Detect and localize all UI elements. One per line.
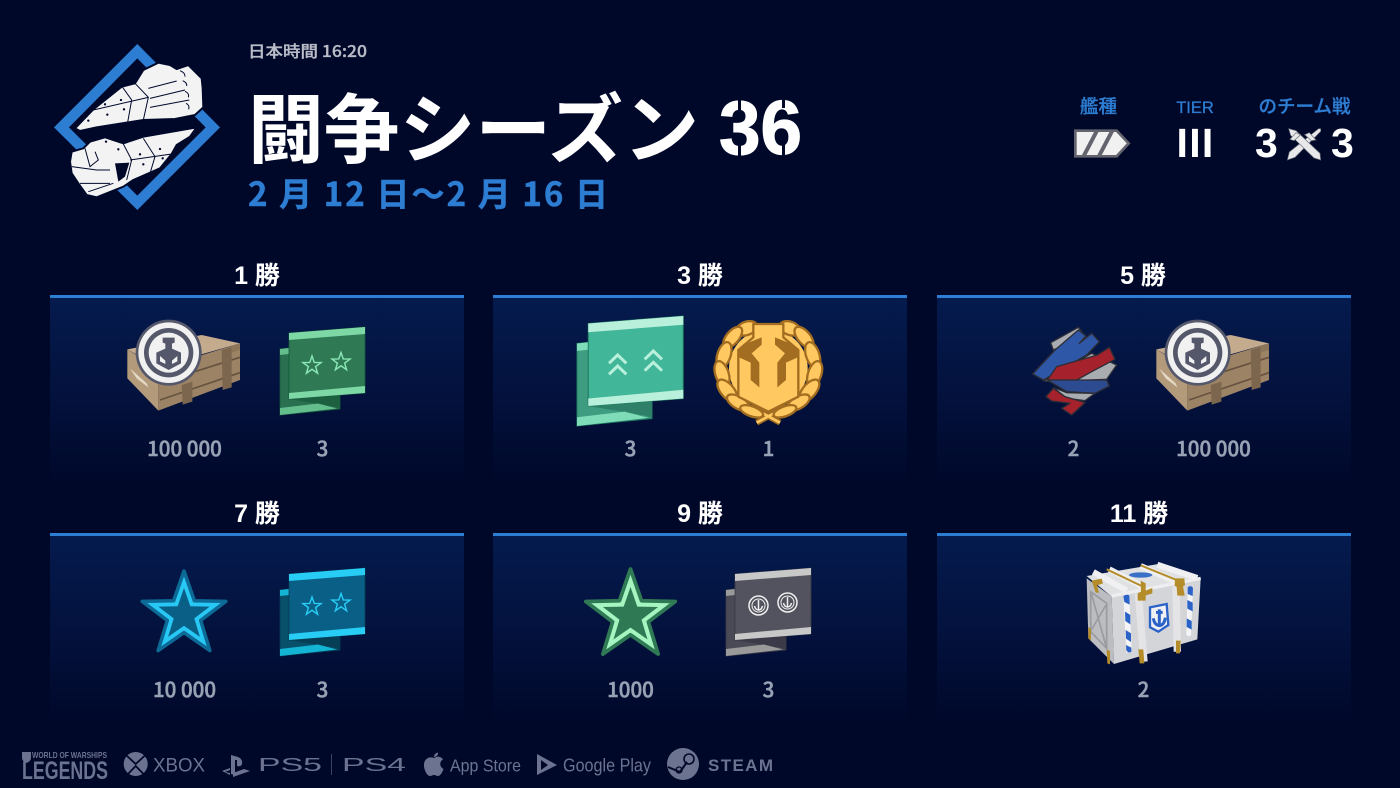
panel: 5 wins xyxy=(937,262,1351,485)
logo: World of Warships Legends: WORLD OF WARSHIPS xyxy=(32,750,107,760)
season number: 36 xyxy=(719,86,802,171)
battle info: team battle xyxy=(1255,93,1354,166)
value: star reward: 10 000 xyxy=(153,673,216,703)
logo: Google Play xyxy=(537,754,651,776)
panel: 9 wins xyxy=(493,500,907,723)
panel: 3 wins xyxy=(493,262,907,485)
logo: Steam: STEAM xyxy=(708,756,773,775)
icon: lower gauntlet xyxy=(70,127,197,197)
logo: PS5 and PS4: PS5 xyxy=(258,755,322,775)
reward: teal chevron flag xyxy=(577,316,683,426)
reward: camouflage patch xyxy=(1033,327,1117,415)
icon: upper gauntlet xyxy=(75,63,203,131)
reward: credits crate xyxy=(1156,320,1269,411)
battle info: team battle: のチーム戦 xyxy=(1259,93,1351,119)
reward: cyan star xyxy=(142,571,226,651)
logo: Xbox: XBOX xyxy=(153,756,205,776)
logo: Xbox xyxy=(124,752,205,776)
reward: green star xyxy=(586,569,675,654)
local time label: 日本時間 16:20 xyxy=(248,38,367,62)
panel: 11 wins xyxy=(937,500,1351,723)
battle info: ship class: 艦種 xyxy=(1080,93,1117,119)
logo: PS5 and PS4 xyxy=(222,754,406,777)
value: containers: 2 xyxy=(1138,673,1149,703)
battle info: team battle: 3 xyxy=(1255,120,1278,166)
heading: 7 wins: 7 勝 xyxy=(234,500,280,528)
value: flags: 3 xyxy=(763,673,774,703)
battle info: team battle: 3 xyxy=(1331,120,1354,166)
value: credits: 100 000 xyxy=(147,432,222,462)
logo: Google Play: Google Play xyxy=(563,756,651,776)
title: 闘争シーズン xyxy=(248,69,699,179)
logo: World of Warships Legends xyxy=(22,750,108,785)
heading: 11 wins: 11 勝 xyxy=(1110,500,1168,528)
icon: blue diamond frame xyxy=(54,44,220,210)
value: flags: 3 xyxy=(625,432,636,462)
battle info: tier: III xyxy=(1176,120,1215,166)
logo: App Store: App Store xyxy=(450,756,521,776)
value: camouflage: 2 xyxy=(1068,432,1079,462)
heading: 3 wins: 3 勝 xyxy=(677,262,723,290)
heading: 1 win: 1 勝 xyxy=(234,262,280,290)
value: flags: 3 xyxy=(317,673,328,703)
reward: white container xyxy=(1087,564,1201,664)
value: star reward: 1000 xyxy=(607,673,654,703)
value: flags: 3 xyxy=(317,432,328,462)
heading: 9 wins: 9 勝 xyxy=(677,500,723,528)
reward: credits crate xyxy=(127,320,240,411)
battle info: tier: TIER xyxy=(1176,99,1214,117)
battle info: tier xyxy=(1176,99,1215,166)
logo: Steam xyxy=(667,748,773,780)
logo: World of Warships Legends: LEGENDS xyxy=(22,757,108,785)
icon: crossed swords xyxy=(1287,129,1321,160)
date range: 2 月 12 日〜2 月 16 日 xyxy=(248,168,608,216)
panel: 1 win xyxy=(50,262,464,485)
panel: 7 wins xyxy=(50,500,464,723)
reward: cyan star flag xyxy=(280,568,365,656)
value: medal: 1 xyxy=(763,432,774,462)
logo: PS5 and PS4: PS4 xyxy=(342,755,406,775)
heading: 5 wins: 5 勝 xyxy=(1120,262,1166,290)
reward: gold laurel medal xyxy=(712,318,825,423)
footer platform logos xyxy=(22,748,773,785)
logo: App Store xyxy=(424,752,521,776)
reward: green star flag xyxy=(280,327,365,415)
icon: destroyer class xyxy=(1075,130,1129,157)
battle info: ship class xyxy=(1075,93,1129,157)
icon: crossed gauntlets emblem xyxy=(54,44,220,210)
reward: gray anchor flag xyxy=(726,568,811,656)
value: credits: 100 000 xyxy=(1176,432,1251,462)
